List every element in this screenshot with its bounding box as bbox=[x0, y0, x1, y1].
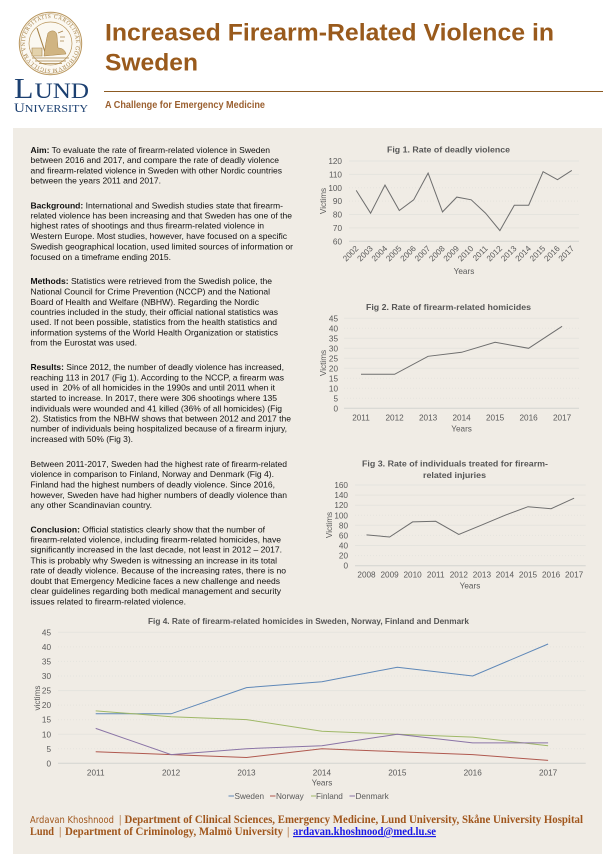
chart: Fig 4 firearm homicides by Nordic country: Fig 4. Rate of firearm-related homicides in Sweden, Norway, Finland and Denmark bbox=[148, 616, 469, 626]
chart: Fig 2 rate of firearm-related homicides: 2017 bbox=[553, 414, 572, 423]
text block: methods: countries included in the study, their official national statistics was bbox=[30, 307, 278, 317]
text block: methods bbox=[30, 276, 278, 348]
chart: Fig 1 rate of deadly violence: 2015 bbox=[528, 244, 548, 263]
title: Sweden bbox=[105, 50, 198, 76]
text block: aim: between 2016 and 2017, and compare the rate of deadly violence bbox=[30, 155, 279, 165]
text block: conclusion: issues related to firearm-related violence. bbox=[30, 597, 186, 607]
chart: Fig 4 firearm homicides by Nordic country bbox=[33, 616, 586, 801]
chart: Fig 4 firearm homicides by Nordic country: 0 bbox=[46, 759, 51, 768]
text block: background: highest rates of shootings and thus firearm-related violence in bbox=[30, 221, 264, 231]
text block: background: related violence has been increasing and that Sweden has one of the bbox=[30, 211, 292, 221]
chart: Fig 3 rate of individuals treated: 2013 bbox=[473, 571, 491, 580]
chart: Fig 2 rate of firearm-related homicides: Years bbox=[451, 425, 472, 434]
chart: Fig 4 firearm homicides by Nordic country: 45 bbox=[42, 628, 51, 637]
chart: Fig 2 rate of firearm-related homicides: 20 bbox=[329, 364, 338, 373]
text block: results: used in 20% of all homicides in the 1990s and until 2011 when it bbox=[30, 383, 276, 393]
chart: Fig 3 rate of individuals treated: 2017 bbox=[565, 571, 584, 580]
chart: Fig 2 rate of firearm-related homicides bbox=[319, 302, 579, 434]
chart: Fig 2 rate of firearm-related homicides: 35 bbox=[329, 334, 338, 343]
chart: Fig 1 rate of deadly violence: Fig 1. Rate of deadly violence bbox=[387, 145, 510, 155]
chart: Fig 4 firearm homicides by Nordic country: 5 bbox=[46, 745, 51, 754]
text block: background: Swedish geographical location, used limited sources of information or bbox=[30, 241, 293, 251]
legend: Finland bbox=[316, 792, 343, 801]
chart: Fig 2 rate of firearm-related homicides: Victims bbox=[319, 350, 328, 376]
chart: Fig 3 rate of individuals treated: 60 bbox=[339, 531, 348, 540]
chart: Fig 4 firearm homicides by Nordic country: 30 bbox=[42, 672, 51, 681]
chart: Fig 1 rate of deadly violence bbox=[319, 145, 579, 276]
text block: conclusion: doubt that Emergency Medicine faces a new challenge and needs bbox=[30, 576, 280, 586]
text block: comparison: Finland had the highest numbers of deadly violence. Since 2016, bbox=[30, 480, 275, 490]
chart: Fig 4 firearm homicides by Nordic country: 2017 bbox=[539, 769, 558, 778]
text block: conclusion: clear guidelines regarding both medical management and security bbox=[30, 586, 282, 596]
legend: Denmark bbox=[356, 792, 390, 801]
series: Sweden bbox=[96, 644, 548, 714]
chart: Fig 1 rate of deadly violence: 2010 bbox=[456, 244, 476, 263]
text block: results: started to increase. In 2017, there were 306 shootings where 135 bbox=[30, 393, 277, 403]
chart: Fig 3 rate of individuals treated: Victims bbox=[325, 512, 334, 538]
text block: background: Background: International and Swedish studies state that firearm- bbox=[30, 200, 283, 210]
footer: author and affiliations: Department of Criminology, Malmö University bbox=[65, 826, 283, 838]
chart: Fig 1 rate of deadly violence: 80 bbox=[333, 210, 342, 220]
chart: Fig 3 rate of individuals treated: 120 bbox=[334, 501, 348, 510]
text block: conclusion bbox=[30, 525, 286, 607]
footer: author and affiliations: | bbox=[119, 814, 121, 826]
chart: Fig 2 rate of firearm-related homicides: 2015 bbox=[486, 414, 505, 423]
text block: comparison: Between 2011-2017, Sweden had the highest rate of firearm-related bbox=[30, 459, 287, 469]
chart: Fig 1 rate of deadly violence: 2017 bbox=[557, 244, 576, 263]
text block: background bbox=[30, 200, 293, 262]
text block: aim: Aim: To evaluate the rate of firearm-related violence in Sweden bbox=[30, 145, 270, 155]
footer: author and affiliations bbox=[30, 814, 583, 838]
chart: Fig 1 rate of deadly violence: 2013 bbox=[499, 244, 519, 263]
text block: results: Results: Since 2012, the number of deadly violence has increased, bbox=[30, 362, 284, 372]
text block: background: Western Europe. Most studies, however, have focused on a specific bbox=[30, 231, 287, 241]
footer: author and affiliations: | bbox=[59, 826, 61, 838]
chart: Fig 1 rate of deadly violence: 2007 bbox=[413, 244, 433, 263]
chart: Fig 3 rate of individuals treated: 2012 bbox=[450, 571, 468, 580]
title: Increased Firearm-Related Violence in bbox=[105, 20, 554, 46]
chart: Fig 3 rate of individuals treated: 2010 bbox=[403, 571, 422, 580]
chart: Fig 1 rate of deadly violence: Victims bbox=[319, 188, 328, 214]
chart: Fig 4 firearm homicides by Nordic country: 2012 bbox=[162, 769, 181, 778]
chart: Fig 3 rate of individuals treated: related injuries bbox=[423, 470, 486, 480]
chart: Fig 2 rate of firearm-related homicides: 45 bbox=[329, 314, 338, 323]
text block: methods: from the Eurostat was used. bbox=[30, 338, 137, 348]
chart: Fig 3 rate of individuals treated: 2016 bbox=[542, 571, 561, 580]
logo: Lund University bbox=[14, 12, 89, 115]
chart: Fig 1 rate of deadly violence: 2016 bbox=[542, 244, 562, 263]
wordmark: LUND: LUND bbox=[14, 74, 89, 105]
chart: Fig 4 firearm homicides by Nordic country: Years bbox=[312, 779, 332, 788]
chart: Fig 3 rate of individuals treated: 140 bbox=[334, 491, 348, 500]
chart: Fig 2 rate of firearm-related homicides: 25 bbox=[329, 354, 338, 363]
chart: Fig 3 rate of individuals treated: 80 bbox=[339, 521, 348, 530]
subtitle: A Challenge for Emergency Medicine bbox=[105, 100, 265, 111]
chart: Fig 4 firearm homicides by Nordic country: 20 bbox=[42, 701, 51, 710]
series: Norway bbox=[96, 749, 548, 760]
chart: Fig 2 rate of firearm-related homicides: 0 bbox=[333, 404, 338, 413]
chart: Fig 4 firearm homicides by Nordic country: victims bbox=[33, 685, 42, 711]
footer: author and affiliations: | bbox=[287, 826, 289, 838]
chart: Fig 3 rate of individuals treated: 0 bbox=[343, 562, 348, 571]
chart: Fig 1 rate of deadly violence: 2008 bbox=[427, 244, 447, 263]
text block: methods: Methods: Statistics were retrieved from the Swedish police, the bbox=[30, 276, 272, 286]
chart: Fig 1 rate of deadly violence: 70 bbox=[333, 224, 342, 233]
chart: Fig 1 rate of deadly violence: 2004 bbox=[370, 244, 390, 263]
series: Finland bbox=[96, 711, 548, 746]
chart: Fig 2 rate of firearm-related homicides: 40 bbox=[329, 324, 338, 333]
footer: author and affiliations: ardavan.khoshnood@med.lu.se bbox=[293, 826, 436, 838]
chart: Fig 4 firearm homicides by Nordic country: 2014 bbox=[313, 769, 331, 778]
text block: conclusion: This is probably why Sweden is witnessing an increase in its total bbox=[30, 556, 277, 566]
text block: aim: between the years 2011 and 2017. bbox=[30, 176, 161, 186]
chart: Fig 1 rate of deadly violence: 2003 bbox=[356, 244, 375, 263]
footer: author and affiliations: Ardavan Khoshnood bbox=[30, 815, 114, 826]
chart: Fig 4 firearm homicides by Nordic country: 35 bbox=[42, 657, 51, 666]
chart: Fig 3 rate of individuals treated: 100 bbox=[334, 511, 348, 520]
chart: Fig 4 firearm homicides by Nordic country: 2016 bbox=[464, 769, 482, 778]
text block: comparison: however, Sweden have had higher numbers of deadly violence than bbox=[30, 490, 287, 500]
text block: results: individuals were wounded and 41 killed (36% of all homicides) (Fig bbox=[30, 403, 282, 413]
chart: Fig 3 rate of individuals treated: 2015 bbox=[519, 571, 538, 580]
text block: results: increased with 50% (Fig 3). bbox=[30, 434, 133, 444]
chart: Fig 4 firearm homicides by Nordic country: 15 bbox=[42, 716, 51, 725]
text block: conclusion: rate of deadly violence. Because of the increasing rates, there is no bbox=[30, 566, 286, 576]
text block: results: number of individuals being hospitalized because of a firearm injury, bbox=[30, 424, 287, 434]
chart: Fig 3 rate of individuals treated: 20 bbox=[339, 552, 348, 561]
wordmark: University: UNIVERSITY bbox=[14, 101, 88, 115]
chart: Fig 1 rate of deadly violence: 60 bbox=[333, 237, 342, 246]
series: Denmark bbox=[96, 728, 548, 755]
chart: Fig 3 rate of individuals treated: 2014 bbox=[496, 571, 514, 580]
chart: Fig 1 rate of deadly violence: 2005 bbox=[384, 244, 404, 263]
chart: Fig 4 firearm homicides by Nordic country: 10 bbox=[42, 730, 51, 739]
legend: Sweden bbox=[234, 792, 265, 801]
text block: methods: National Council for Crime Prevention (NCCP) and the National bbox=[30, 287, 270, 297]
chart: Fig 2 rate of firearm-related homicides: 2013 bbox=[419, 414, 438, 423]
chart: Fig 3 rate of individuals treated bbox=[325, 459, 586, 591]
title bbox=[105, 20, 554, 76]
chart: Fig 2 rate of firearm-related homicides: 2014 bbox=[452, 414, 471, 423]
text block: methods: information systems of the World Health Organization or statistics bbox=[30, 328, 278, 338]
text block: conclusion: Conclusion: Official statistics clearly show that the number of bbox=[30, 525, 266, 535]
chart: Fig 4 firearm homicides by Nordic country: 2013 bbox=[237, 769, 256, 778]
text block: results: reaching 113 in 2017 (Fig 1). According to the NCCP, a firearm was bbox=[30, 372, 284, 382]
chart: Fig 4 firearm homicides by Nordic country: 2015 bbox=[388, 769, 407, 778]
chart: Fig 2 rate of firearm-related homicides: 2016 bbox=[519, 414, 538, 423]
footer: author and affiliations: Department of Clinical Sciences, Emergency Medicine, Lund University, Skåne University Hospital bbox=[124, 814, 583, 826]
text block: aim bbox=[30, 145, 282, 186]
text block: aim: and firearm-related violence in Sweden with other Nordic countries bbox=[30, 166, 282, 176]
chart: Fig 4 firearm homicides by Nordic country: 25 bbox=[42, 687, 51, 696]
chart: Fig 1 rate of deadly violence: 2009 bbox=[442, 244, 461, 263]
chart: Fig 1 rate of deadly violence: 120 bbox=[328, 157, 342, 166]
chart: Fig 2 rate of firearm-related homicides: 2011 bbox=[352, 414, 370, 423]
chart: Fig 1 rate of deadly violence: 100 bbox=[328, 184, 342, 193]
text block: comparison: violence in comparison to Finland, Norway and Denmark (Fig 4). bbox=[30, 469, 274, 479]
text block: comparison bbox=[30, 459, 287, 510]
chart: Fig 3 rate of individuals treated: 2011 bbox=[427, 571, 445, 580]
chart: Fig 3 rate of individuals treated: Years bbox=[460, 582, 480, 591]
chart: Fig 3 rate of individuals treated: 2008 bbox=[357, 571, 376, 580]
chart: Fig 2 rate of firearm-related homicides: Fig 2. Rate of firearm-related homicides bbox=[366, 302, 531, 312]
chart: Fig 1 rate of deadly violence: 2006 bbox=[399, 244, 418, 263]
chart: Fig 1 rate of deadly violence: 2014 bbox=[514, 244, 533, 263]
text block: conclusion: firearm-related violence, including firearm-related homicides, have bbox=[30, 535, 281, 545]
chart: Fig 2 rate of firearm-related homicides: 2012 bbox=[385, 414, 404, 423]
chart: Fig 2 rate of firearm-related homicides: 10 bbox=[329, 384, 338, 393]
text block: comparison: any other Scandinavian country. bbox=[30, 500, 152, 510]
chart: Fig 1 rate of deadly violence: Years bbox=[454, 267, 474, 276]
chart: Fig 1 rate of deadly violence: 2011 bbox=[471, 244, 490, 263]
text block: background: focused on a timeframe ending 2015. bbox=[30, 252, 171, 262]
chart: Fig 4 firearm homicides by Nordic country: 40 bbox=[42, 643, 51, 652]
footer: author and affiliations: Lund bbox=[30, 826, 55, 838]
chart: Fig 2 rate of firearm-related homicides: 30 bbox=[329, 344, 338, 353]
text block: results: 2). Statistics from the NBHW shows that between 2012 and 2017 the bbox=[30, 414, 291, 424]
chart: Fig 4 firearm homicides by Nordic country: 2011 bbox=[87, 769, 105, 778]
chart: Fig 1 rate of deadly violence: 110 bbox=[329, 170, 342, 179]
chart: Fig 1 rate of deadly violence: 90 bbox=[333, 197, 342, 206]
chart: Fig 3 rate of individuals treated: 160 bbox=[334, 481, 348, 490]
chart: Fig 2 rate of firearm-related homicides: 15 bbox=[329, 374, 338, 383]
chart: Fig 3 rate of individuals treated: 2009 bbox=[380, 571, 399, 580]
chart: Fig 2 rate of firearm-related homicides: 5 bbox=[333, 394, 338, 403]
legend bbox=[228, 792, 390, 801]
chart: Fig 3 rate of individuals treated: 40 bbox=[339, 542, 348, 550]
icon: university seal: SIGILLVM VNIVERSITATIS CAROLINAE GOTHORVM bbox=[21, 14, 80, 73]
chart: Fig 1 rate of deadly violence: 2012 bbox=[485, 244, 504, 263]
text block: methods: Board of Health and Welfare (NBHW). Regarding the Nordic bbox=[30, 297, 259, 307]
text block: methods: used. If not been possible, statistics from the health statistics and bbox=[30, 317, 277, 327]
text block: conclusion: significantly increased in the last decade, not least in 2012 – 2017. bbox=[30, 545, 282, 555]
chart: Fig 1 rate of deadly violence: 2002 bbox=[341, 244, 361, 263]
text block: results bbox=[30, 362, 291, 444]
legend: Norway bbox=[276, 792, 305, 801]
chart: Fig 3 rate of individuals treated: Fig 3. Rate of individuals treated for firearm- bbox=[362, 459, 548, 469]
